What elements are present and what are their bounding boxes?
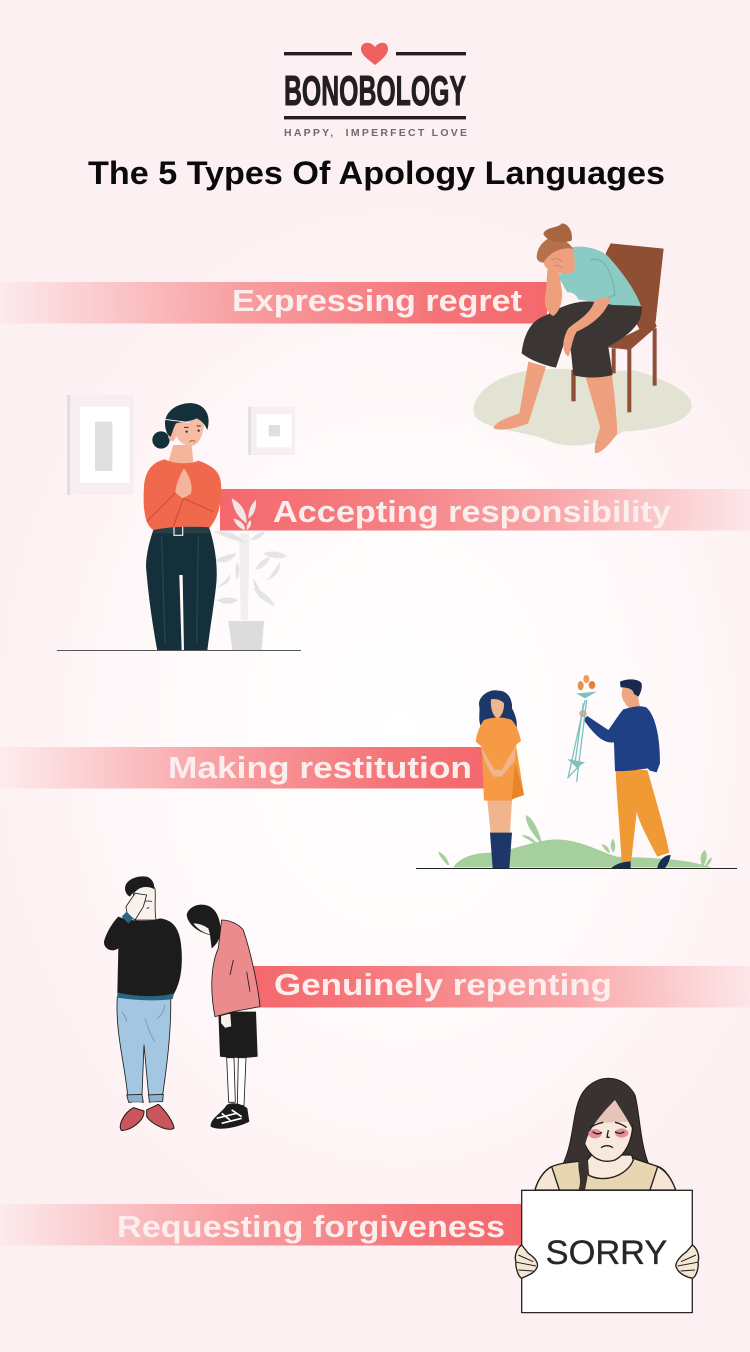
shorts [522,301,642,377]
shoulder skin [535,1167,676,1190]
neck [587,1155,633,1179]
logo: Bonobology [284,43,467,139]
man hand [579,710,587,717]
illustration: woman on chair [473,223,692,453]
man sweater [583,706,660,772]
woman arms [481,745,516,777]
man socks [132,1102,161,1110]
ground blob [473,369,692,446]
pot [228,621,264,650]
right hand [676,1245,699,1278]
logo: Bonobology: BONOBOLOGY [284,67,466,114]
sign text: SORRY [546,1234,667,1272]
arm propping head [545,267,562,316]
praying hands [175,468,192,498]
woman skirt [218,1012,258,1058]
banner: Making restitution [0,747,485,788]
hair [165,403,209,437]
hair [537,238,573,263]
man jeans cuffs [127,1094,163,1102]
right leg [585,373,617,453]
man sweater hem [117,992,174,1000]
back hair [563,1078,648,1190]
wall frame small [248,407,295,455]
man shoes [120,1108,144,1131]
banner: Genuinely repenting: Genuinely repenting [274,967,612,1002]
belt [153,527,210,533]
green hill [453,839,712,867]
banner: Accepting responsibility: Accepting responsibility [273,494,672,529]
title: The 5 Types Of Apology Languages [88,155,665,191]
left hand [515,1245,537,1278]
front hair [578,1082,635,1190]
grass blades [438,815,712,867]
man hair [125,876,154,897]
illustration: couple looking down [104,876,260,1131]
woman face [491,699,504,718]
wall frame large [67,395,134,495]
shirt [557,247,641,306]
banner: Requesting forgiveness [0,1204,525,1246]
hair bun [152,431,170,449]
woman hair [187,905,221,948]
man head [622,686,640,709]
man jeans [117,997,171,1096]
top [535,1158,676,1190]
illustration: woman holding sorry sign [515,1078,699,1313]
cheek blush right [615,1128,628,1138]
banner: Genuinely repenting [252,966,750,1008]
banner: Expressing regret [0,282,547,324]
boots [490,833,512,868]
woman face [193,923,210,934]
man sweater [104,917,182,997]
trousers [146,530,217,651]
banner: Making restitution: Making restitution [168,750,472,785]
left leg [493,362,546,430]
banner: Requesting forgiveness: Requesting forgiveness [117,1209,505,1244]
woman shoes [211,1103,249,1129]
sweater [144,459,221,530]
man legs [616,770,669,862]
facial features [184,426,201,427]
ear [168,429,176,441]
hanging arm [563,297,611,357]
woman legs [227,1058,246,1106]
hair bun [543,223,572,242]
face [174,416,204,446]
illustration: man offering flowers to woman [438,675,712,869]
icon: heart [361,43,388,65]
man raised hand [126,893,147,920]
floor line [416,868,737,869]
woman hand [221,1013,232,1028]
logo: Bonobology: HAPPY, IMPERFECT LOVE [284,127,467,139]
face [582,1097,633,1161]
neck [168,445,193,468]
banner: Expressing regret: Expressing regret [232,283,522,318]
man neck and face [133,885,156,920]
dress [476,717,524,801]
woman legs [487,800,512,833]
facial features [590,1122,627,1148]
face [543,248,575,274]
bouquet [567,675,597,782]
chair [571,243,664,412]
woman jacket [212,920,260,1017]
man shoes [611,861,631,869]
floor line [57,650,301,651]
woman hair [479,690,517,727]
illustration: woman with praying hands [67,395,295,651]
plant [213,498,287,650]
sign [522,1190,692,1313]
banner: Accepting responsibility [220,489,750,530]
cheek blush left [588,1129,602,1138]
